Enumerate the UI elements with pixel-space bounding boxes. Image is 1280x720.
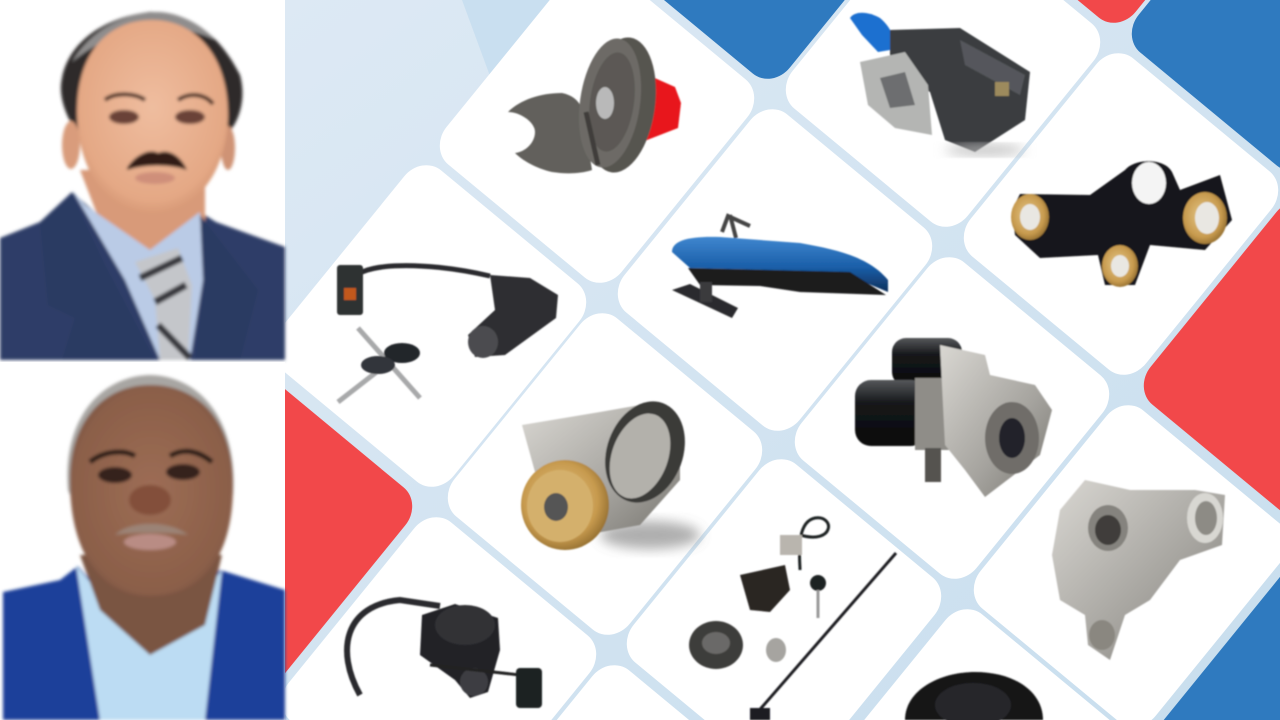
- nose: [129, 485, 171, 515]
- tile: lock set: [616, 448, 952, 720]
- product: door handle: [672, 215, 888, 318]
- neck: [80, 170, 205, 255]
- portrait: bottom executive: [0, 362, 285, 720]
- tile: blue top right: [1132, 0, 1280, 168]
- collage background: [285, 0, 1280, 720]
- hair: [67, 375, 233, 495]
- product: ignition lock with cable: [347, 600, 542, 708]
- shirt: [76, 565, 222, 720]
- product: ignition switch with keys: [337, 265, 558, 402]
- tile: blue top: [664, 0, 845, 79]
- tile: ignition switch: [285, 165, 586, 487]
- face: [77, 20, 228, 214]
- neck: [80, 555, 222, 655]
- tile: red right: [1144, 208, 1280, 510]
- product: alternator: [521, 390, 700, 550]
- tile: red left: [285, 389, 412, 674]
- tie: [135, 248, 192, 360]
- tile: fuel cap: [429, 0, 765, 293]
- jacket base: [3, 566, 285, 720]
- hair: [61, 12, 242, 135]
- jacket base: [0, 192, 285, 360]
- tile: starter motor: [794, 257, 1110, 579]
- moustache and lips: [115, 524, 188, 535]
- tile: door lock: [786, 0, 1100, 227]
- shirt: [72, 190, 203, 360]
- product: door lock: [850, 13, 1030, 155]
- product: round cap: [905, 672, 1043, 720]
- moustache: [127, 151, 187, 170]
- eyes: [98, 467, 132, 483]
- tile: bracket: [953, 42, 1280, 385]
- product: throttle housing: [1052, 480, 1225, 660]
- product: starter motor: [855, 338, 1052, 497]
- tile: bottom small: [557, 665, 689, 720]
- tile: throttle housing: [963, 394, 1280, 720]
- product: lock set: [689, 518, 896, 720]
- product: bracket: [1011, 161, 1232, 287]
- lips: [135, 172, 175, 184]
- brows: [90, 451, 212, 462]
- brows: [105, 94, 213, 104]
- photo background: [0, 0, 285, 360]
- decorative pale shape: [462, 0, 550, 76]
- tile: red top: [1078, 0, 1146, 23]
- product: fuel cap: [508, 33, 681, 177]
- lapels: [40, 195, 258, 360]
- tile: alternator: [448, 313, 762, 635]
- eyes: [109, 110, 139, 124]
- photo background: [0, 362, 285, 720]
- tile: blue bottom right: [1164, 577, 1280, 720]
- ears: [62, 121, 80, 169]
- tile: ignition lock: [285, 517, 596, 720]
- tile: door handle: [618, 109, 932, 431]
- grey hair top: [72, 12, 215, 62]
- tile: round cap: [864, 609, 1110, 720]
- portrait: top executive: [0, 0, 285, 360]
- face: [70, 385, 233, 596]
- panel: product collage: [285, 0, 1280, 720]
